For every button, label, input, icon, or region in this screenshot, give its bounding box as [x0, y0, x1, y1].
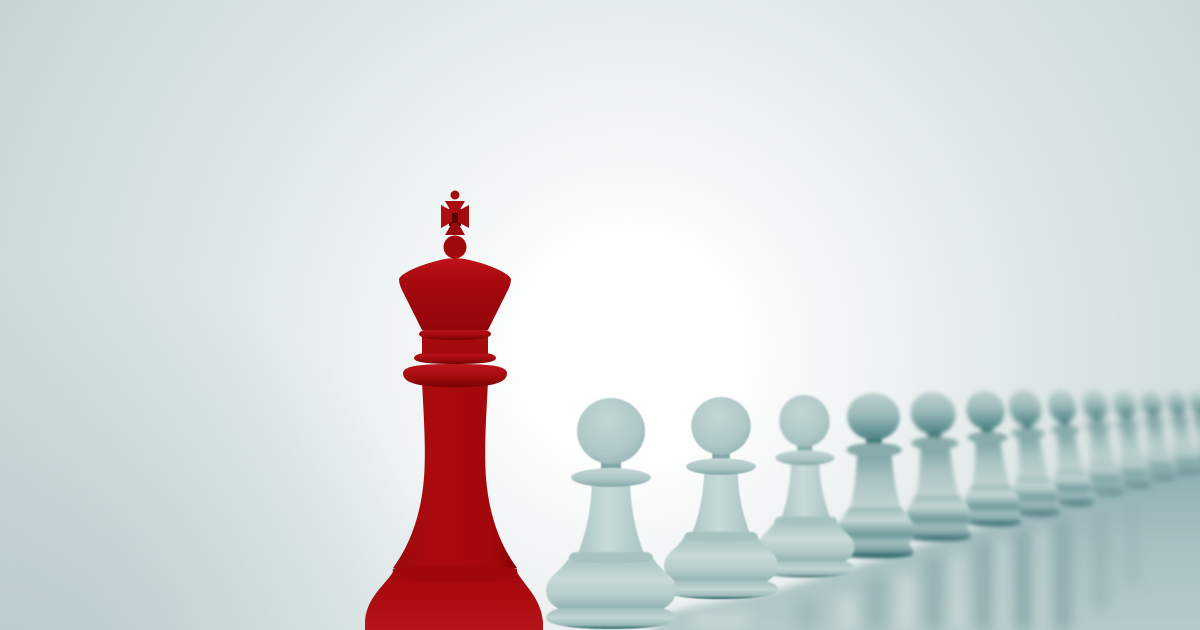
king neck ball — [444, 236, 466, 258]
king base collar — [393, 565, 517, 583]
pawn row: far end, fading out to the right — [546, 390, 1200, 629]
pawn 13 — [1184, 391, 1200, 470]
pawn 7 — [1000, 390, 1061, 516]
king crown — [399, 258, 511, 330]
king neck — [422, 336, 488, 354]
king stem — [393, 382, 517, 568]
king upper ring — [414, 352, 496, 364]
king base — [365, 572, 543, 630]
pawn 6 — [956, 391, 1022, 526]
reflective floor with pawn reflections — [640, 458, 1200, 630]
king cross — [441, 201, 469, 235]
king lower ring — [419, 328, 491, 340]
pawn 5 — [900, 392, 973, 541]
king collar — [403, 364, 507, 387]
pawn 3 — [756, 395, 855, 577]
pawn 11 — [1135, 391, 1177, 479]
king top ball — [450, 190, 460, 200]
pawn 8 — [1040, 390, 1095, 506]
pawn 9 — [1075, 390, 1125, 494]
pawn 2 — [664, 397, 778, 599]
pawn 12 — [1161, 391, 1200, 473]
red king — [365, 190, 543, 630]
pawn 1: nearest — [546, 398, 676, 629]
pawn 4 — [835, 393, 915, 558]
pawn 10 — [1107, 391, 1152, 487]
